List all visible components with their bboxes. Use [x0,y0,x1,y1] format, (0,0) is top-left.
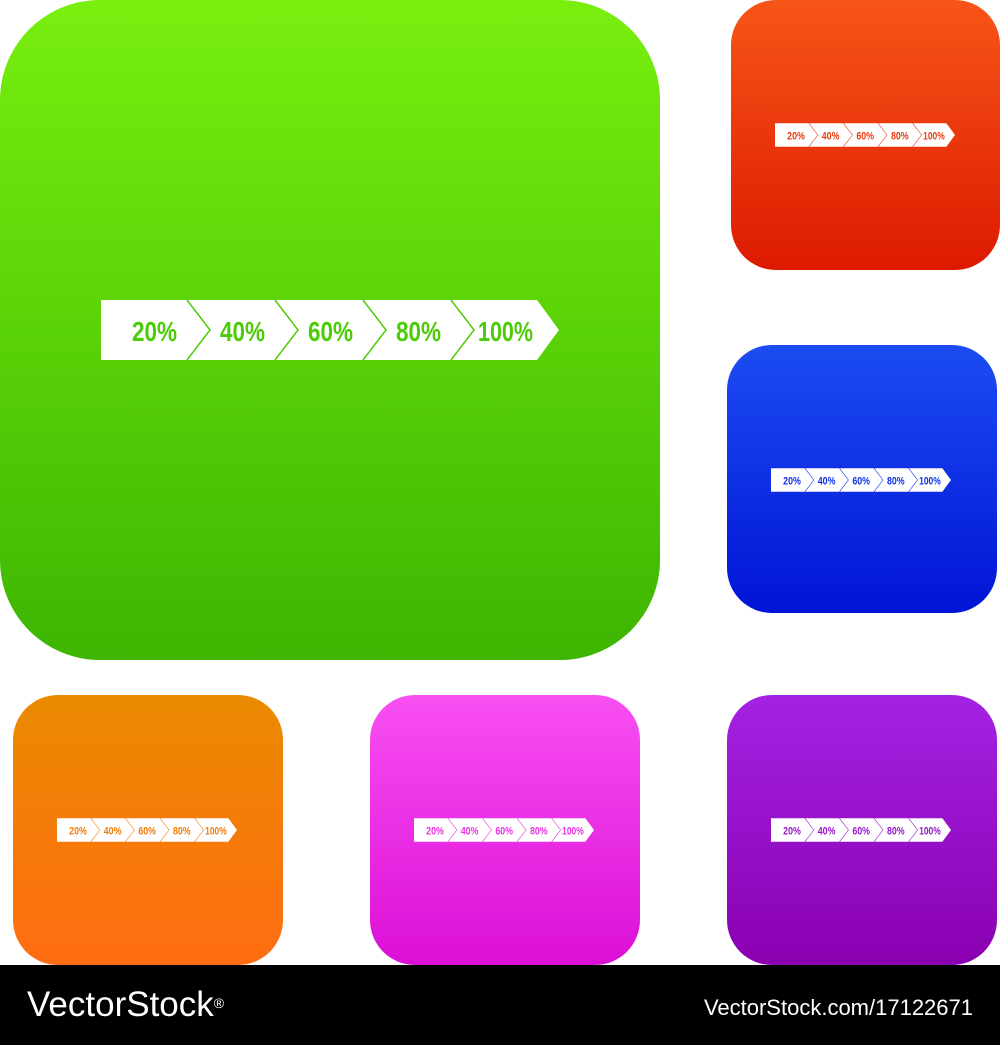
panel: pink [370,695,640,965]
arrow: orange progress [57,818,237,842]
arrow: green progress [101,300,559,360]
panel: red [731,0,1000,270]
panel: green large [0,0,660,660]
panel: purple [727,695,997,965]
arrow: purple progress [771,818,951,842]
arrow: red progress [775,123,955,147]
arrow: blue progress [771,468,951,492]
footer logo: VectorStock® [27,985,225,1024]
panel: blue [727,345,997,613]
footer bar [0,965,1000,1045]
footer url: VectorStock.com/17122671 [704,995,973,1020]
arrow: pink progress [414,818,594,842]
panel: orange [13,695,283,965]
